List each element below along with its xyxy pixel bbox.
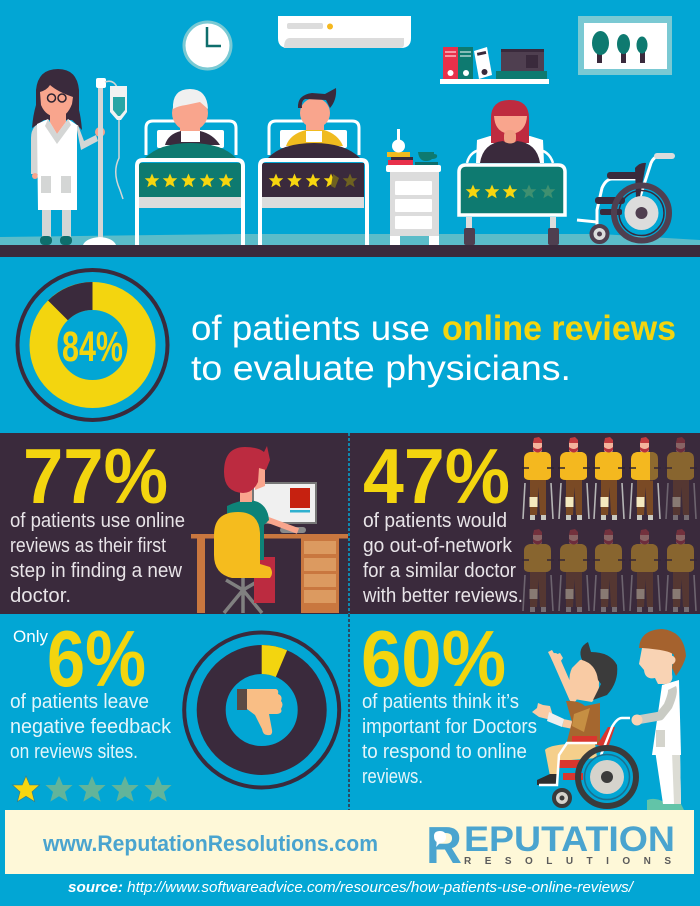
heading: 6%: 6% <box>47 614 146 703</box>
source citation: source: http://www.softwareadvice.com/resources/how-patients-use-online-reviews/ <box>68 879 635 896</box>
logo: Reputation Resolutions: R <box>426 817 462 875</box>
text: 60% description: of patients think it’s <box>362 691 519 713</box>
logo: Reputation Resolutions <box>426 817 675 875</box>
bed 3: three stars <box>459 100 565 245</box>
heading: 77%: 77% <box>23 432 168 520</box>
text: 77% description: reviews as their first <box>10 535 166 557</box>
pictogram: ten patients, 4.5 highlighted <box>522 437 697 612</box>
panel: 60% respond to reviews <box>361 614 686 810</box>
text: 84% description: of patients use <box>191 309 430 348</box>
logo: Reputation Resolutions: EPUTATION <box>464 820 675 859</box>
hospital ward illustration <box>0 16 700 257</box>
heading: 47%: 47% <box>363 432 510 520</box>
text: 60% description: important for Doctors <box>362 716 537 738</box>
framed picture of trees <box>578 16 672 75</box>
text: 60% description: reviews. <box>362 766 423 788</box>
text: 6% description: on reviews sites. <box>10 741 138 763</box>
icon: air conditioner <box>278 16 411 48</box>
text: only: Only <box>13 627 48 646</box>
text: 6% description: of patients leave <box>10 691 149 713</box>
illustration: nurse pushing patient in wheelchair <box>532 629 686 810</box>
bedside table <box>386 129 441 245</box>
wall shelf with binders <box>440 47 549 84</box>
doctor with glasses <box>31 69 105 245</box>
text: 84% description: online reviews <box>442 309 676 348</box>
donut chart: 84% <box>18 270 168 420</box>
text: 6% description <box>10 691 172 763</box>
text: 6% description: negative feedback <box>10 716 172 738</box>
nurse <box>632 629 686 810</box>
text: 77% description: of patients use online <box>10 510 185 532</box>
text: 47% description: with better reviews. <box>362 585 523 607</box>
text: 60% description <box>362 691 537 788</box>
bed 2: four and a half stars <box>260 88 367 245</box>
text: 84% description <box>191 309 676 388</box>
panel: footer banner <box>5 810 694 875</box>
center divider <box>348 433 350 810</box>
panel: 47% out-of-network <box>362 432 697 612</box>
heading: 60%: 60% <box>361 614 506 703</box>
text: 77% description: doctor. <box>10 585 71 607</box>
IV drip stand <box>83 78 127 245</box>
donut chart: 84%: 84% <box>62 323 123 371</box>
rating: one of five stars <box>12 776 172 802</box>
text: 60% description: to respond to online <box>362 741 527 763</box>
text: 47% description: of patients would <box>363 510 507 532</box>
text: 47% description: for a similar doctor <box>363 560 516 582</box>
icon: person at computer desk <box>191 446 348 613</box>
floor <box>0 234 700 257</box>
website url: www.ReputationResolutions.com <box>42 831 378 856</box>
icon: thumbs down <box>237 689 282 735</box>
icon: wall clock <box>182 20 232 70</box>
panel: 6% negative feedback <box>10 614 339 802</box>
text: 47% description <box>362 510 523 607</box>
panel: 77% first step <box>10 432 348 613</box>
text: 84% description: to evaluate physicians. <box>191 349 571 388</box>
text: 77% description: step in finding a new <box>10 560 183 582</box>
donut chart: 6% with thumbs down <box>184 632 339 788</box>
bed 1: five stars <box>137 89 243 245</box>
text: 47% description: go out-of-network <box>363 535 513 557</box>
wheelchair patient <box>532 642 636 806</box>
panel: 84% statistic <box>18 270 676 420</box>
logo: Reputation Resolutions: RESOLUTIONS <box>464 856 671 867</box>
panel: dark statistics row <box>0 433 700 614</box>
text: 77% description <box>10 510 185 607</box>
icon: wheelchair <box>577 153 675 242</box>
